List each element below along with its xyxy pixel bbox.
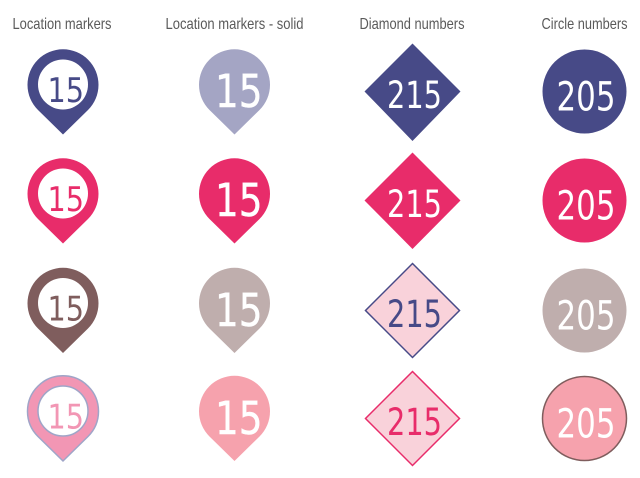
marker outline brown: 15 xyxy=(48,290,84,330)
solid marker taupe: 15 xyxy=(215,284,262,337)
diamond crimson xyxy=(364,152,460,249)
circle taupe: 205 xyxy=(556,294,616,340)
marker outline brown xyxy=(28,268,98,353)
solid marker crimson: 15 xyxy=(215,174,262,227)
circle navy xyxy=(542,50,626,134)
circle crimson: 205 xyxy=(556,184,616,230)
diamond crimson: 215 xyxy=(387,183,442,226)
circle light pink with brown outline xyxy=(542,376,626,460)
solid marker light pink: 15 xyxy=(215,392,262,445)
marker outline crimson xyxy=(28,158,98,244)
marker outline navy xyxy=(28,49,98,134)
marker outline pink with lavender border xyxy=(28,376,98,461)
marker outline pink with lavender border: 15 xyxy=(48,398,84,438)
circle navy: 205 xyxy=(556,74,616,120)
circle taupe xyxy=(542,268,626,352)
solid marker light pink xyxy=(199,376,270,461)
diamond pale pink crimson outline xyxy=(366,372,460,466)
solid marker lavender: 15 xyxy=(215,65,262,118)
heading: location markers solid: Location markers - solid xyxy=(166,16,304,33)
circle light pink with brown outline: 205 xyxy=(556,402,616,448)
solid marker lavender xyxy=(199,49,270,134)
diamond navy: 215 xyxy=(387,74,442,117)
diamond pale pink crimson outline: 215 xyxy=(387,401,442,444)
diamond pale pink navy outline: 215 xyxy=(387,293,442,336)
marker outline crimson: 15 xyxy=(48,180,84,220)
solid marker crimson xyxy=(199,158,270,244)
diamond navy xyxy=(364,44,460,141)
circle crimson xyxy=(542,158,626,242)
diamond pale pink navy outline xyxy=(366,264,460,358)
marker outline navy: 15 xyxy=(48,71,84,111)
heading: location markers: Location markers xyxy=(12,16,112,33)
solid marker taupe xyxy=(199,268,270,353)
heading: diamond numbers: Diamond numbers xyxy=(360,16,464,33)
